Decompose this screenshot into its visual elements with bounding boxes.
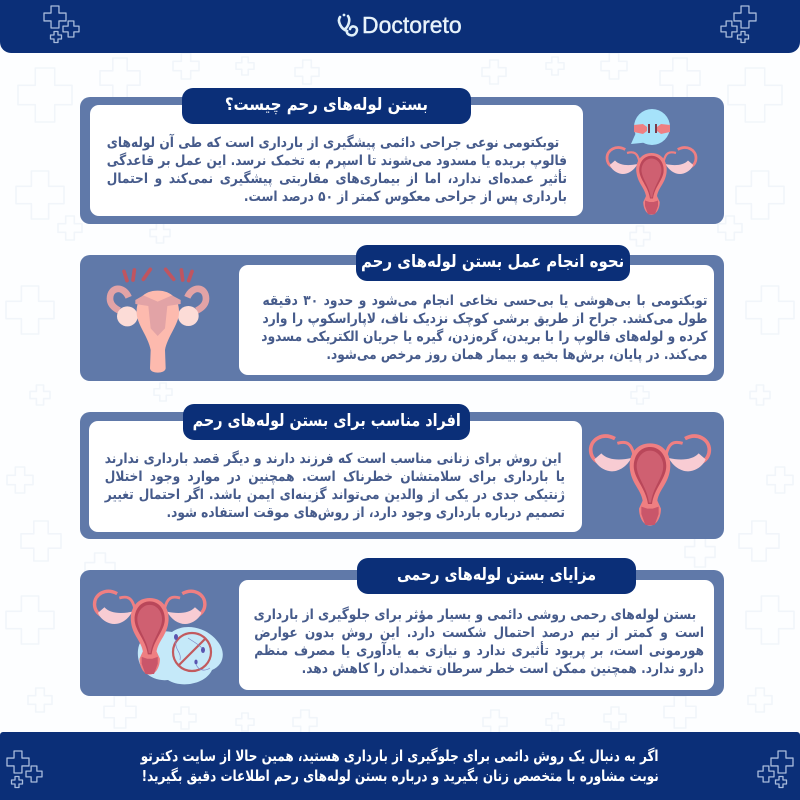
- body text: [107, 134, 567, 205]
- text card: [89, 421, 582, 532]
- body text: طول می‌کشد. جراح از طریق برشی کوچک نزدیک ناف، لاپاراسکوپ را وارد: [262, 311, 707, 327]
- heading: how the procedure is done: [356, 245, 630, 281]
- footer bar: [0, 732, 800, 800]
- heading: suitable candidates: [183, 404, 470, 440]
- icon: uterus with pain marks: [106, 267, 210, 373]
- body text: توبکتومی نوعی جراحی دائمی پیشگیری از بارداری است که طی آن لوله‌های: [107, 135, 559, 151]
- icon: header crosses: [43, 5, 757, 44]
- icon: uterus with no-sperm symbol: [92, 590, 223, 684]
- header bar: [0, 0, 800, 53]
- heading: benefits: مزایای بستن لوله‌های رحمی: [397, 565, 596, 585]
- body text: [261, 293, 708, 363]
- icon: uterus with blocked tube bubble: [606, 109, 698, 215]
- body text: فالوپ بریده یا مسدود می‌شوند تا اسپرم به تخمک نرسد. این عمل بر قاعدگی: [107, 153, 567, 169]
- heading: how the procedure is done: نحوه انجام عمل بستن لوله‌های رحم: [361, 252, 625, 272]
- body text: است و کمتر از نیم درصد احتمال شکست دارد. این روش بدون عوارض: [254, 625, 704, 641]
- icon: footer crosses: [6, 750, 794, 788]
- icon: uterus: [588, 434, 712, 526]
- logo: Doctoreto: [338, 12, 462, 38]
- body text: بستن لوله‌های رحمی روشی دائمی و بسیار مؤثر برای جلوگیری از بارداری: [254, 607, 696, 623]
- heading: what is tubal ligation: بستن لوله‌های رحم چیست؟: [225, 95, 428, 115]
- body text: توبکتومی با بی‌هوشی یا بی‌حسی نخاعی انجام می‌شود و حدود ۳۰ دقیقه: [262, 293, 707, 309]
- body text: هورمونی است، بر پریود تأثیری ندارد و نیازی به یادآوری یا مصرف منظم: [254, 643, 704, 659]
- body text: یا بارداری برای سلامتشان خطرناک است. همچنین در موارد وجود اختلال: [105, 469, 565, 485]
- logo wordmark: Doctoreto: [362, 12, 462, 38]
- body text: ژنتیکی جدی در یکی از والدین می‌تواند گزینه‌ای ایمن باشد. اگر احتمال تغییر: [105, 487, 565, 503]
- body text: [254, 606, 704, 677]
- heading: suitable candidates: افراد مناسب برای بستن لوله‌های رحم: [192, 411, 461, 431]
- panel: what is tubal ligation: [80, 97, 724, 224]
- text card: [90, 105, 583, 216]
- panel: benefits: [80, 570, 724, 696]
- body text: بارداری پس از جراحی معکوس کمتر از ۵۰ درصد است.: [244, 189, 567, 205]
- body text: تأثیر عمده‌ای ندارد، اما از بیماری‌های مقاربتی پیشگیری نمی‌کند و احتمال: [107, 171, 567, 187]
- heading: benefits: [357, 558, 636, 594]
- body text: دارو ندارد. همچنین ممکن است خطر سرطان تخمدان را کاهش دهد.: [302, 661, 704, 677]
- body text: این روش برای زنانی مناسب است که فرزند دارند و دیگر قصد بارداری ندارند: [105, 451, 562, 467]
- text card: [239, 580, 714, 690]
- call to action line 2: نوبت مشاوره با متخصص زنان بگیرید و درباره بستن لوله‌های رحم اطلاعات دقیق بگیرید!: [141, 767, 659, 785]
- body text: می‌کند. در پایان، برش‌ها بخیه و بیمار همان روز مرخص می‌شود.: [326, 347, 707, 363]
- body text: [104, 450, 565, 521]
- icon: stethoscope: [338, 14, 358, 37]
- panel: suitable candidates: [80, 412, 724, 539]
- panel: how the procedure is done: [80, 255, 724, 381]
- body text: کرده و لوله‌های فالوپ را با بریدن، گره‌زدن، گیره یا جریان الکتریکی مسدود: [261, 329, 707, 345]
- heading: what is tubal ligation: [182, 88, 471, 124]
- text card: [239, 265, 714, 375]
- call to action line 1: اگر به دنبال یک روش دائمی برای جلوگیری از بارداری هستید، همین حالا از سایت دکترتو: [141, 747, 659, 765]
- body text: تصمیم درباره بارداری وجود دارد، از روش‌های موقت استفاده شود.: [166, 505, 565, 521]
